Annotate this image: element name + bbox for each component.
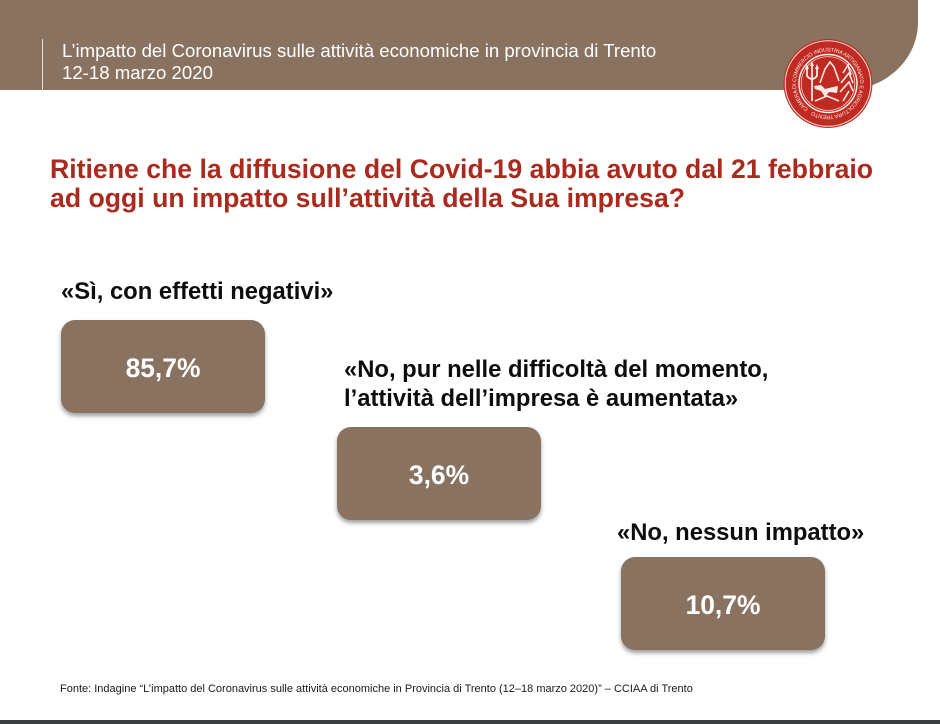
header band bbox=[0, 0, 918, 90]
source note: Fonte: Indagine “L’impatto del Coronavirus sulle attività economiche in Provincia di Trento (12–18 marzo 2020)” – CCIAA di Trento bbox=[60, 683, 693, 695]
answer label: activity increased bbox=[344, 356, 768, 412]
value box: 85,7% bbox=[61, 320, 265, 413]
header title: 12-18 marzo 2020 bbox=[62, 62, 213, 83]
value box: 10,7%: 10,7% bbox=[686, 590, 760, 620]
value box: 3,6%: 3,6% bbox=[409, 460, 469, 490]
header title bbox=[62, 40, 656, 83]
value box: 10,7% bbox=[621, 557, 825, 650]
answer label: activity increased: «No, pur nelle difficoltà del momento, bbox=[344, 356, 768, 383]
answer label: no impact: «No, nessun impatto» bbox=[617, 519, 864, 546]
answer label: negative effects: «Sì, con effetti negativi» bbox=[61, 278, 333, 305]
answer label: activity increased: l’attività dell’impresa è aumentata» bbox=[344, 385, 738, 412]
question heading bbox=[50, 154, 873, 213]
question heading: ad oggi un impatto sull’attività della Sua impresa? bbox=[50, 183, 685, 213]
icon: chamber of commerce seal: CAMERA DI COMMERCIO INDUSTRIA ARTIGIANATO E AGRICOLTURA TRENTO bbox=[792, 48, 864, 120]
header divider bbox=[42, 39, 43, 90]
icon: chamber of commerce seal bbox=[784, 39, 872, 128]
question heading: Ritiene che la diffusione del Covid-19 abbia avuto dal 21 febbraio bbox=[50, 154, 873, 184]
value box: 85,7%: 85,7% bbox=[126, 353, 200, 383]
bottom edge bar bbox=[0, 720, 940, 724]
value box: 3,6% bbox=[337, 427, 541, 520]
header title: L’impatto del Coronavirus sulle attività economiche in provincia di Trento bbox=[62, 40, 656, 61]
